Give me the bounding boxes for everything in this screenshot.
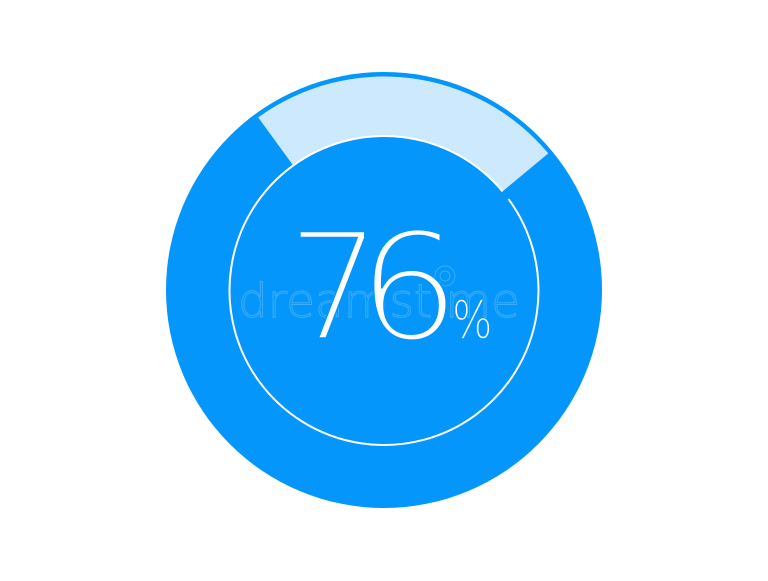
percent sign: %	[452, 291, 493, 351]
watermark logo	[435, 266, 455, 286]
watermark	[238, 266, 520, 328]
percentage value	[288, 203, 493, 373]
watermark text: dreamstime	[238, 274, 520, 328]
digit 7: 7	[288, 203, 381, 373]
inner white ring with gap	[168, 75, 600, 506]
light remaining 24 percent arc segment	[258, 77, 548, 191]
digit 6: 6	[358, 204, 460, 373]
blue disc background	[166, 72, 602, 508]
